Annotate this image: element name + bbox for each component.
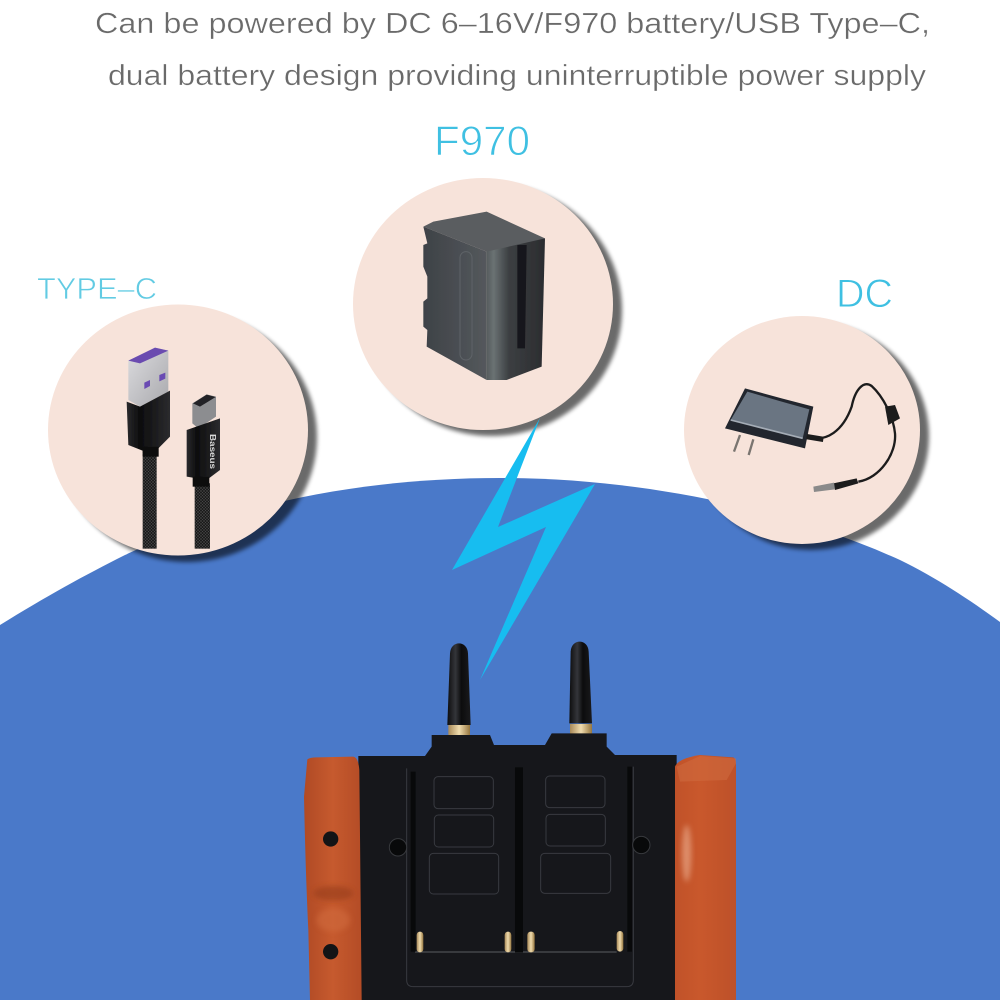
heading text xyxy=(95,8,930,92)
panel: USB Type-C cable xyxy=(48,304,317,562)
device body xyxy=(358,733,677,1000)
heading text: Can be powered by DC 6–16V/F970 battery/USB Type–C, xyxy=(95,8,930,40)
icon: USB and Type-C cables: Baseus xyxy=(208,434,218,469)
panel: F970 battery xyxy=(353,178,622,436)
heading text: dual battery design providing uninterruptible power supply xyxy=(108,60,927,92)
battery plates xyxy=(407,767,633,987)
right wooden grip xyxy=(675,755,736,1000)
icon: lightning bolt xyxy=(452,418,595,680)
rail shadows xyxy=(389,767,650,952)
device: monitor rear with dual battery plates xyxy=(304,642,736,1000)
antennas xyxy=(447,642,592,735)
icon: USB and Type-C cables xyxy=(127,348,220,549)
blue dome background xyxy=(0,478,1000,1000)
label: F970: F970 xyxy=(434,117,530,164)
icon: battery xyxy=(423,212,545,380)
panel: DC adapter xyxy=(684,316,929,550)
label: DC: DC xyxy=(836,272,893,316)
icon: power adapter xyxy=(725,384,900,492)
contact pins xyxy=(417,931,623,952)
left wooden grip xyxy=(304,757,362,1000)
label: TYPE-C: TYPE–C xyxy=(37,271,157,306)
